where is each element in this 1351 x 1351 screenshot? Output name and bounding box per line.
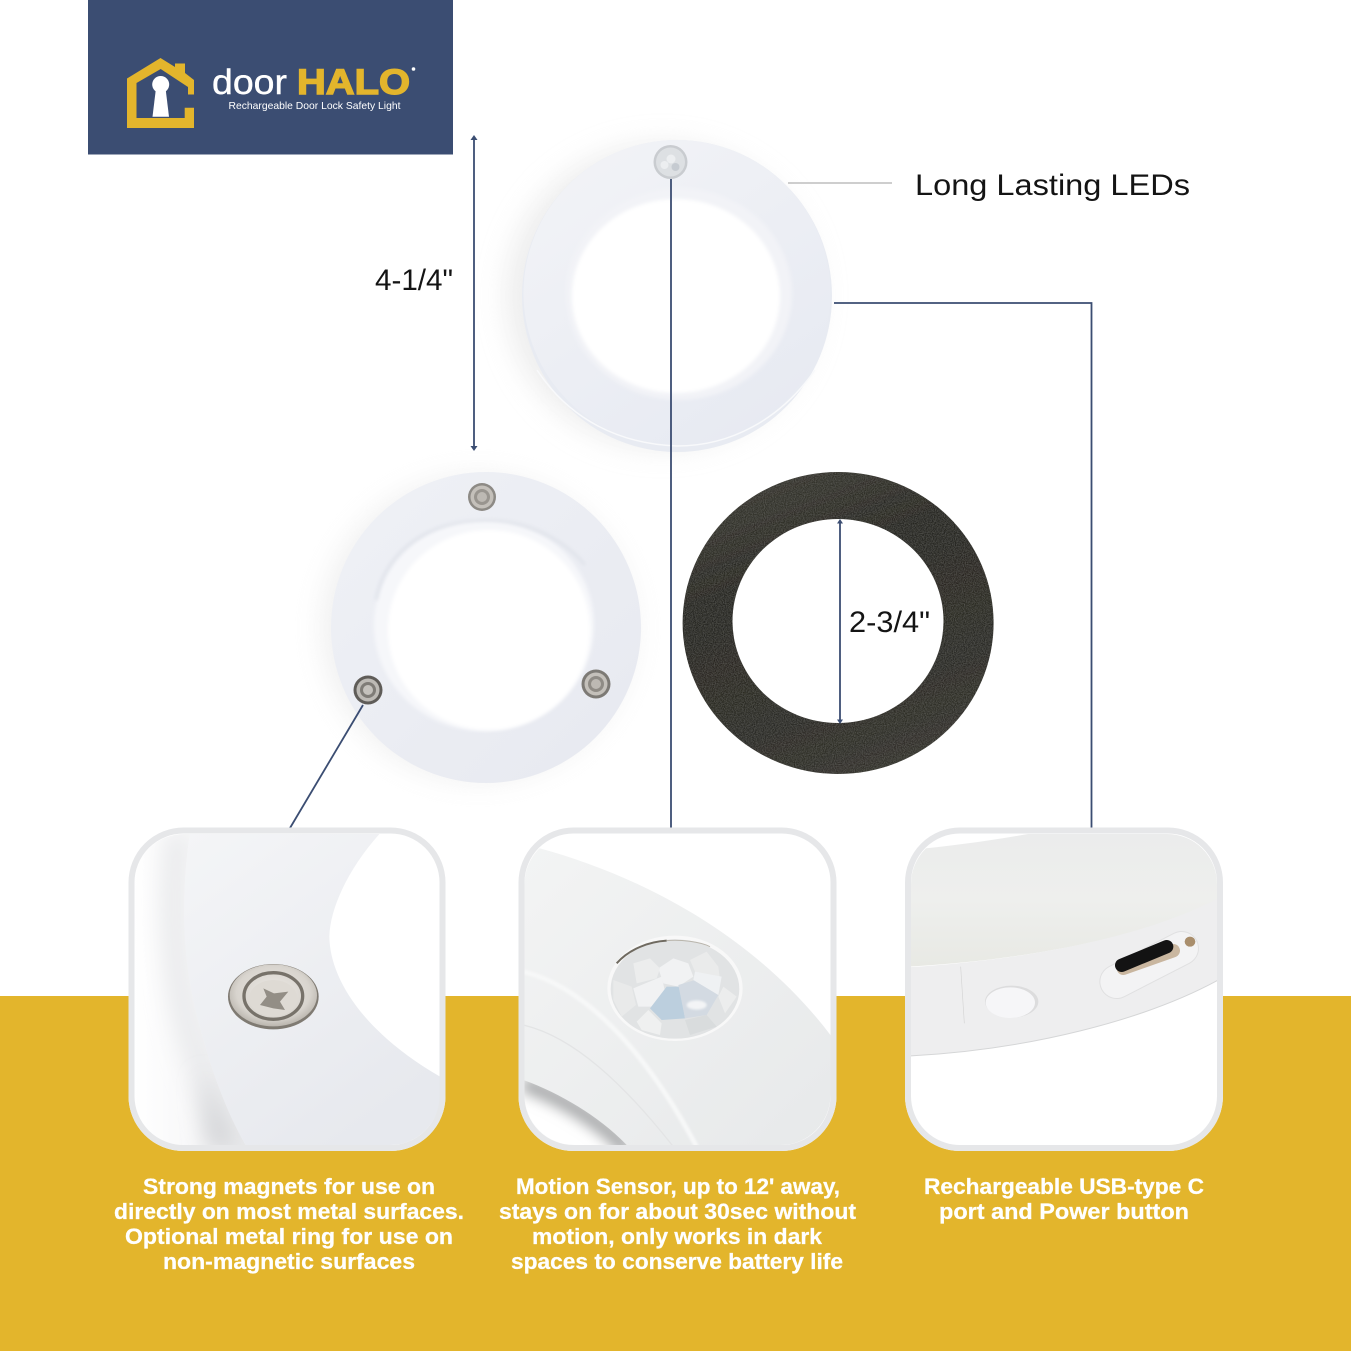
- ring front face: [184, 833, 440, 1147]
- bevel highlight: [579, 998, 698, 1145]
- caption: motion sensor: Motion Sensor, up to 12' away,: [516, 1174, 840, 1199]
- panel: motion sensor close-up card: [518, 828, 836, 1151]
- logo wordmark: HALO: HALO: [297, 63, 410, 102]
- leader line: sensor to motion card: [670, 179, 672, 828]
- label: inner diameter: 2-3/4": [849, 606, 930, 639]
- leader line: LEDs: [788, 182, 892, 184]
- caption: USB charging: port and Power button: [939, 1199, 1189, 1224]
- leader line: ring edge to USB card: [834, 303, 1092, 828]
- caption: magnets: non-magnetic surfaces: [163, 1249, 415, 1274]
- caption: magnets: Optional metal ring for use on: [125, 1224, 453, 1249]
- yellow footer band: [0, 996, 1351, 1351]
- caption: motion sensor: stays on for about 30sec without: [499, 1199, 857, 1224]
- panel: magnets close-up card: [128, 828, 446, 1151]
- logo panel: [88, 0, 453, 154]
- logo tagline: Rechargeable Door Lock Safety Light: [228, 100, 401, 112]
- screw left: [354, 676, 382, 704]
- icon: motion sensor lens: [654, 145, 688, 179]
- seam: [961, 967, 964, 1023]
- ring surface: [523, 847, 832, 1147]
- ring top dome: [908, 833, 1218, 967]
- caption: USB charging: Rechargeable USB-type C: [924, 1174, 1204, 1199]
- ring side band: [908, 898, 1218, 1056]
- caption: magnets: Strong magnets for use on: [143, 1174, 435, 1199]
- sensor lens: [607, 936, 743, 1041]
- label: outer diameter: 4-1/4": [375, 264, 453, 297]
- leader line: screw to magnets card: [290, 705, 363, 828]
- product: black metal ring: [683, 472, 994, 774]
- USB-C port: [1117, 937, 1195, 982]
- arrow: outer diameter dimension: [470, 135, 478, 451]
- caption: magnets: [114, 1174, 464, 1274]
- icon: house with keyhole: [127, 58, 194, 128]
- product: magnet ring with three screws: [322, 472, 641, 783]
- screw: [228, 964, 319, 1029]
- caption: magnets: directly on most metal surfaces.: [114, 1199, 464, 1224]
- caption: motion sensor: spaces to conserve battery life: [511, 1249, 843, 1274]
- caption: USB charging: [924, 1174, 1204, 1224]
- product: main LED ring: [506, 140, 832, 452]
- ring side shading: [194, 1132, 246, 1145]
- power button: [985, 986, 1038, 1018]
- screw right: [582, 670, 610, 698]
- caption: motion sensor: motion, only works in dark: [532, 1224, 823, 1249]
- registered mark: [412, 67, 415, 71]
- hole at bottom left: [524, 1080, 613, 1145]
- panel: USB port close-up card: [905, 828, 1223, 1151]
- arrow: inner diameter dimension: [837, 519, 843, 724]
- caption: motion sensor: [499, 1174, 857, 1274]
- label: Long Lasting LEDs: Long Lasting LEDs: [915, 169, 1190, 202]
- logo wordmark: door: door: [212, 63, 287, 102]
- screw top: [468, 483, 496, 511]
